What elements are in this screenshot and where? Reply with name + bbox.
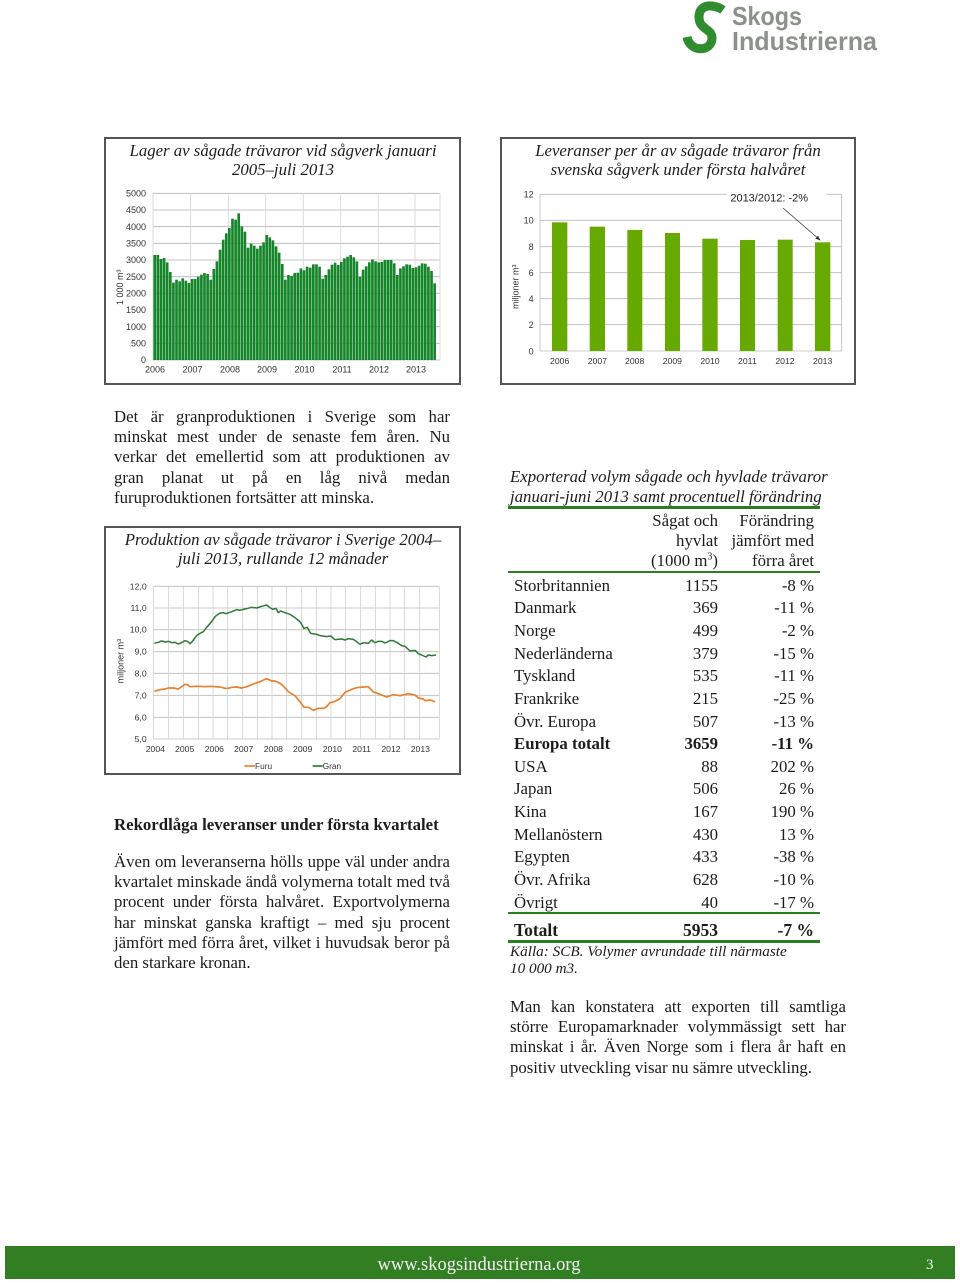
legend: Furu	[255, 761, 272, 771]
table: export by country: 628	[693, 870, 718, 889]
footer url: www.skogsindustrierna.org	[378, 1255, 580, 1275]
bar chart: inventory 2006-2013: 2013	[406, 364, 426, 374]
line chart: production Furu and Gran: 2007	[234, 744, 253, 754]
text block: deliveries paragraph: jämfört med förra året, vilket i huvudsak beror på	[114, 933, 450, 952]
text block: deliveries paragraph: den starkare kronan.	[114, 953, 251, 972]
source note: 10 000 m3.	[510, 960, 578, 977]
panel title: deliveries: svenska sågverk under första halvåret	[551, 160, 805, 179]
bar chart: inventory 2006-2013: 2009	[257, 364, 277, 374]
table: export by country: 507	[693, 712, 718, 730]
table: export by country: -8 %	[782, 576, 814, 594]
bar chart: deliveries per year: 2009	[663, 356, 682, 366]
bar chart: inventory 2006-2013: 4500	[126, 205, 146, 215]
bar chart: deliveries per year: 2008	[625, 356, 644, 366]
legend: Gran	[323, 761, 342, 771]
table: export by country: Danmark	[514, 598, 576, 617]
text block: intro paragraph: verkar det emellertid som att produktionen av	[114, 447, 450, 466]
table: export by country: Övr. Europa	[514, 712, 596, 730]
table: export by country: Nederländerna	[514, 644, 613, 662]
panel title: inventory: 2005–juli 2013	[232, 160, 334, 179]
text block: intro paragraph: gran planat ut på en låg nivå medan	[114, 468, 450, 487]
panel title: inventory	[129, 141, 436, 179]
panel title: production: juli 2013, rullande 12 månader	[178, 548, 388, 568]
icon: green S mark	[687, 6, 723, 49]
table: export by country: Frankrike	[514, 688, 579, 708]
table: export by country: Tyskland	[514, 666, 575, 685]
bar chart: inventory 2006-2013: 5000	[126, 188, 146, 198]
line chart: production Furu and Gran: 2005	[175, 744, 194, 754]
wordmark: Skogs	[732, 1, 802, 31]
text block: deliveries paragraph: Även om leveranserna hölls uppe väl under andra	[114, 852, 450, 871]
line chart: production Furu and Gran: 2013	[411, 744, 430, 754]
legend	[244, 761, 342, 771]
table header: Förändring	[739, 511, 814, 530]
bar chart: deliveries per year: 2010	[700, 356, 720, 366]
line: Furu	[154, 679, 435, 710]
heading: record low deliveries: Rekordlåga leveranser under första kvartalet	[114, 815, 439, 834]
bar chart: deliveries per year: 2	[529, 320, 534, 330]
line chart: production Furu and Gran: 7,0	[135, 690, 147, 700]
table: export by country: 430	[693, 824, 718, 844]
table: export by country: -7 %	[778, 920, 814, 940]
bar chart: inventory 2006-2013: 2007	[182, 364, 203, 374]
bar chart: inventory 2006-2013: 2010	[294, 364, 315, 374]
table: export by country: 535	[693, 666, 718, 685]
bar chart: inventory 2006-2013: 1500	[126, 305, 146, 315]
table: export by country: Egypten	[514, 847, 570, 866]
bar chart: deliveries per year: miljoner m³	[511, 264, 521, 309]
line chart: production Furu and Gran: 2006	[205, 744, 224, 754]
panel: inventory chart	[104, 137, 461, 385]
wordmark: Industrierna	[732, 26, 878, 56]
page number: 3	[926, 1257, 934, 1273]
panel title: inventory: Lager av sågade trävaror vid sågverk januari	[129, 141, 436, 160]
line chart: production Furu and Gran: 10,0	[130, 625, 147, 635]
table: export by country: Norge	[514, 621, 556, 640]
table: export by country: 13 %	[779, 824, 814, 844]
table: export by country: 3659	[684, 734, 718, 753]
table: export by country: -10 %	[773, 870, 814, 889]
table: export by country: Storbritannien	[514, 576, 610, 594]
table title: export volume	[508, 467, 828, 506]
bar chart: deliveries per year: 2006	[550, 356, 569, 366]
line chart: production Furu and Gran: 6,0	[135, 712, 147, 722]
table: export by country: Övrigt	[514, 892, 558, 912]
callout: 2013/2012 change: 2013/2012: -2%	[730, 193, 808, 205]
text block: export paragraph	[510, 997, 846, 1077]
bar chart: inventory 2006-2013: 2012	[369, 364, 389, 374]
table: export by country: USA	[514, 756, 548, 776]
bar chart: inventory 2006-2013: 500	[131, 338, 146, 348]
bar chart: deliveries per year: 2012	[775, 356, 795, 366]
table: export by country: 88	[701, 756, 718, 776]
table header: (1000 m3)	[651, 551, 718, 570]
text block: export paragraph: minskat i år. Även Norge som i flera år haft en	[510, 1037, 846, 1056]
bar chart: deliveries per year: 2013	[813, 356, 832, 366]
text block: export paragraph: större Europamarknader volymmässigt sett har	[510, 1017, 846, 1036]
table header	[651, 511, 814, 570]
table: export by country: 1155	[685, 576, 718, 594]
line chart: production Furu and Gran: 2009	[293, 744, 312, 754]
text block: intro paragraph	[114, 407, 450, 507]
bar chart: inventory 2006-2013: 2011	[332, 364, 352, 374]
table: export by country: Mellanöstern	[514, 824, 603, 844]
bar chart: inventory 2006-2013: 3500	[126, 238, 146, 248]
line chart: production Furu and Gran: 2012	[381, 744, 401, 754]
bar chart: deliveries per year: 0	[529, 346, 534, 356]
table: export by country: 215	[693, 688, 718, 708]
line chart: production Furu and Gran: 12,0	[130, 581, 147, 591]
table: export by country: 190 %	[771, 802, 814, 821]
table header: förra året	[752, 551, 814, 570]
table: export by country: 40	[701, 892, 718, 912]
table: export by country: -2 %	[782, 621, 814, 640]
footer bar	[5, 1246, 955, 1279]
line chart: production Furu and Gran: 2011	[352, 744, 371, 754]
table: export by country: -38 %	[773, 847, 814, 866]
text block: deliveries paragraph	[114, 852, 450, 972]
table title: export volume: Exporterad volym sågade och hyvlade trävaror	[510, 467, 828, 486]
table: export by country: 26 %	[779, 779, 814, 798]
bar chart: inventory 2006-2013: 2008	[220, 364, 240, 374]
table: export by country: 167	[693, 802, 718, 821]
table header: Sågat och	[652, 511, 718, 530]
line chart: production Furu and Gran: miljoner m³	[116, 639, 126, 683]
bar chart: deliveries per year: 8	[529, 242, 534, 252]
table: export by country: -11 %	[774, 666, 814, 685]
bar chart: inventory 2006-2013: 4000	[126, 222, 146, 232]
bar chart: inventory 2006-2013: 2000	[126, 288, 146, 298]
source note: Källa: SCB. Volymer avrundade till närmaste	[510, 943, 787, 960]
text block: deliveries paragraph: procent under första halvåret. Exportvolymerna	[114, 892, 450, 911]
panel title: production	[124, 530, 442, 568]
panel: deliveries chart	[500, 137, 856, 385]
arrow: callout to 2013 bar	[783, 208, 821, 241]
table: export by country: -25 %	[773, 688, 814, 708]
bar chart: deliveries per year: 6	[529, 268, 534, 278]
text block: intro paragraph: Det är granproduktionen i Sverige som har	[114, 407, 450, 426]
bar chart: inventory 2006-2013: 2500	[126, 272, 146, 282]
table: export by country: 202 %	[771, 756, 814, 776]
line chart: production Furu and Gran: 5,0	[135, 734, 147, 744]
table: export by country: Totalt	[514, 920, 558, 940]
text block: export paragraph: Man kan konstatera att exporten till samtliga	[510, 997, 846, 1016]
text block: deliveries paragraph: kvartalet minskade ändå volymerna totalt med två	[114, 872, 450, 891]
line chart: production Furu and Gran: 2004	[146, 744, 165, 754]
table: export by country: 369	[693, 598, 718, 617]
text block: export paragraph: positiv utveckling visar nu sämre utveckling.	[510, 1058, 812, 1077]
line chart: production Furu and Gran: 2008	[264, 744, 283, 754]
table: export by country: 379	[693, 644, 718, 662]
line: Gran	[154, 605, 436, 657]
table: export by country: -11 %	[774, 598, 814, 617]
panel title: production: Produktion av sågade trävaror i Sverige 2004–	[125, 530, 441, 548]
bar chart: inventory 2006-2013: 1000	[126, 322, 146, 332]
bar chart: deliveries per year: 12	[524, 190, 534, 200]
bar chart: inventory 2006-2013	[115, 188, 440, 374]
table: export by country: -17 %	[773, 892, 814, 912]
text block: deliveries paragraph: har minskat ganska kraftigt – med sju procent	[114, 913, 450, 932]
bar chart: deliveries per year: 2007	[588, 356, 607, 366]
bar chart: deliveries per year: 4	[529, 294, 534, 304]
source note	[510, 943, 787, 977]
table: export by country: 506	[693, 779, 718, 798]
table: export by country: Europa totalt	[514, 734, 610, 753]
bar chart: inventory 2006-2013: 2006	[145, 364, 165, 374]
table: export by country: -13 %	[773, 712, 814, 730]
table: export by country: -11 %	[772, 734, 814, 753]
line chart: production Furu and Gran: 2010	[323, 744, 342, 754]
line chart: production Furu and Gran	[116, 581, 440, 771]
table: export by country: 433	[693, 847, 718, 866]
wordmark	[732, 1, 878, 56]
table: export by country: 5953	[683, 920, 718, 940]
bar chart: inventory 2006-2013: 3000	[126, 255, 146, 265]
table: export by country: -15 %	[773, 644, 814, 662]
table header: jämfört med	[732, 531, 814, 550]
table: export by country	[508, 506, 820, 943]
bar chart: deliveries per year	[511, 190, 842, 366]
panel title: deliveries: Leveranser per år av sågade trävaror från	[535, 141, 821, 160]
text block: intro paragraph: minskat mest under de senaste fem åren. Nu	[114, 427, 450, 446]
table title: export volume: januari-juni 2013 samt procentuell förändring	[510, 487, 822, 506]
table header: hyvlat	[676, 531, 718, 550]
bar chart: deliveries per year: 10	[524, 216, 534, 226]
logo: Skogs Industrierna	[682, 1, 878, 56]
line chart: production Furu and Gran: 8,0	[135, 668, 147, 678]
bar chart: deliveries per year: 2011	[738, 356, 757, 366]
bar chart: inventory 2006-2013: 1 000 m³	[115, 269, 125, 305]
panel title: deliveries	[535, 141, 821, 179]
table: export by country: Kina	[514, 802, 547, 821]
table: export by country: Japan	[514, 779, 552, 798]
table: export by country: Övr. Afrika	[514, 870, 590, 889]
text block: intro paragraph: furuproduktionen fortsätter att minska.	[114, 488, 374, 507]
panel: production chart	[104, 526, 461, 775]
table: export by country: 499	[693, 621, 718, 640]
line chart: production Furu and Gran: 11,0	[130, 603, 147, 613]
line chart: production Furu and Gran: 9,0	[135, 647, 147, 657]
bar chart: inventory 2006-2013: 0	[141, 355, 146, 365]
